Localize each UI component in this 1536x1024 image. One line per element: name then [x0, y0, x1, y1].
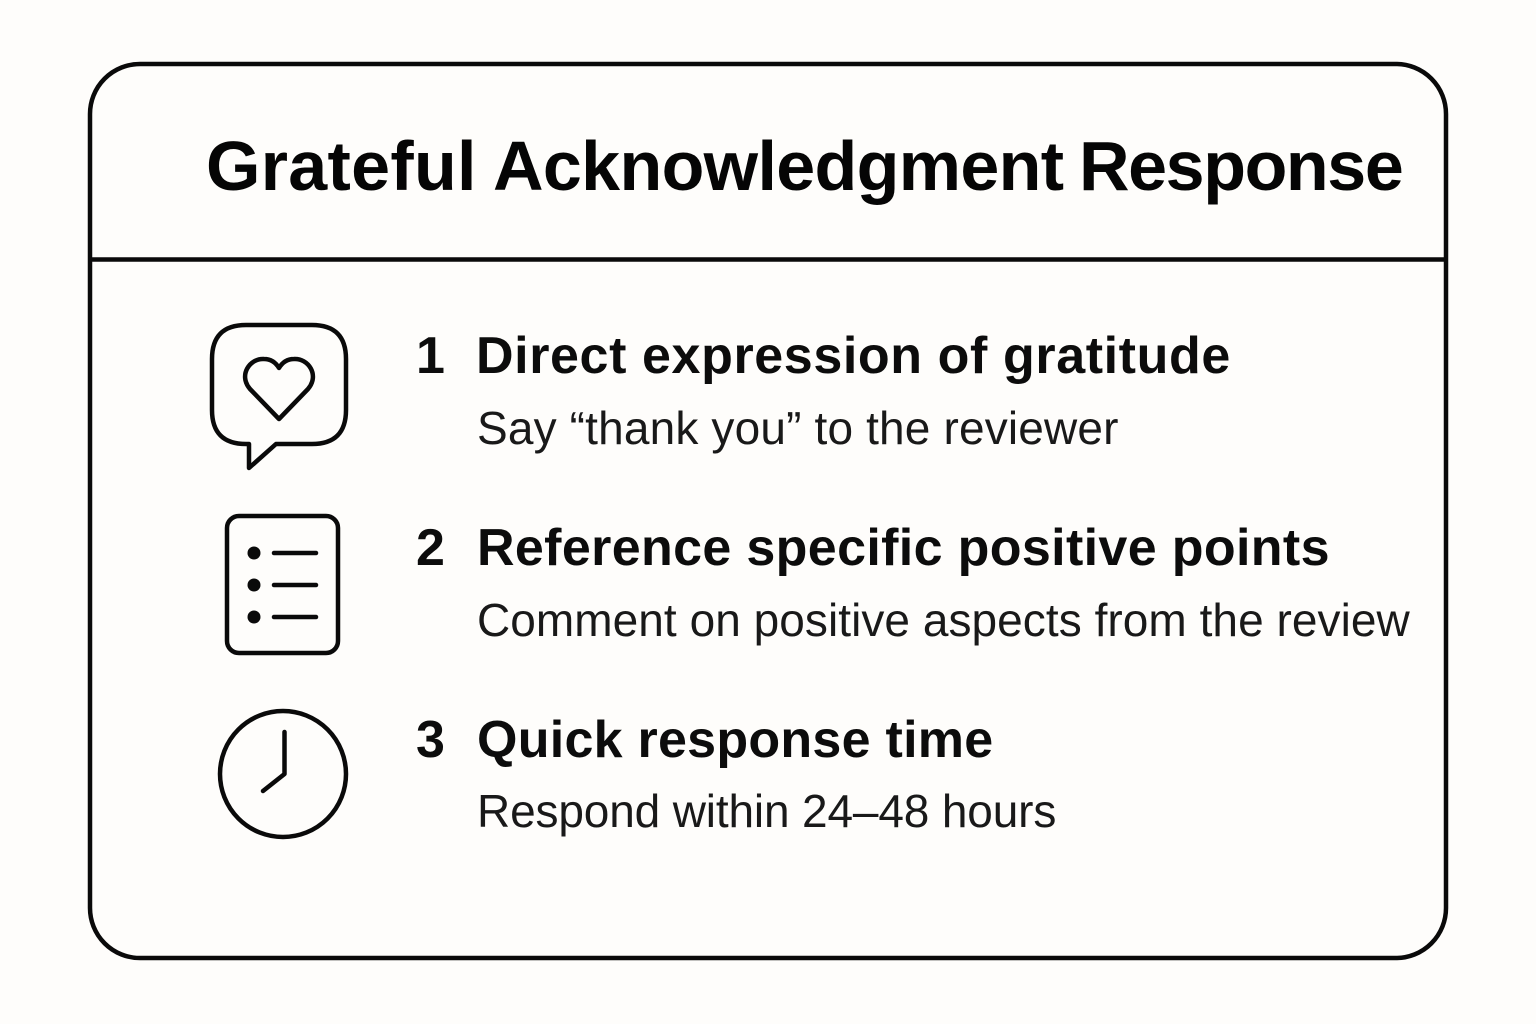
icon: checklist [224, 514, 340, 656]
title: Grateful [206, 127, 477, 205]
step 2 description: Comment on positive aspects from the review [477, 594, 1410, 646]
title: Acknowledgment [493, 127, 1063, 205]
icon: clock [218, 708, 348, 840]
step 3 description: Respond within 24–48 hours [477, 785, 1056, 837]
step 1 heading: Direct expression of gratitude [476, 327, 1231, 385]
step 3 heading: Quick response time [477, 711, 993, 769]
title [206, 127, 1402, 205]
step 2 number: 2 [416, 519, 445, 577]
step 2 heading: Reference specific positive points [477, 519, 1330, 577]
step 3 number: 3 [416, 711, 445, 769]
step 1 description: Say “thank you” to the reviewer [477, 402, 1119, 454]
icon: speech bubble with heart [210, 322, 348, 470]
title: Response [1079, 127, 1402, 205]
step 1 number: 1 [416, 327, 445, 385]
